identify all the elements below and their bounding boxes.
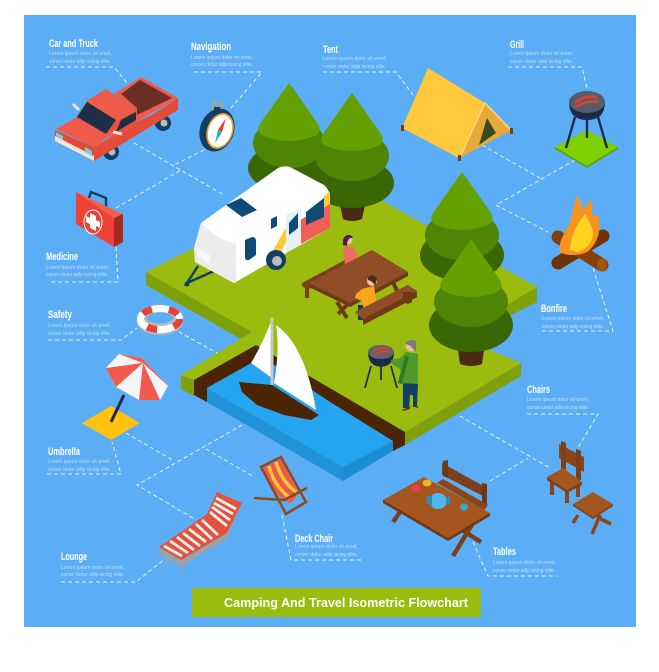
small window: [271, 216, 277, 229]
deck chair label: Deck Chair: [295, 533, 333, 545]
wheels: [103, 115, 171, 160]
tables label: [493, 546, 556, 574]
tent opening: [479, 118, 496, 145]
chairs label: conse ctetur adip iscing elite.: [527, 405, 589, 411]
wheel: [266, 250, 286, 270]
icon: small table: [573, 492, 613, 534]
icon: life ring: [137, 308, 183, 335]
far bench: [302, 260, 352, 298]
left sail: [251, 319, 272, 378]
mast: [270, 318, 274, 385]
teapot: [426, 493, 450, 509]
tree 1: [248, 83, 330, 192]
front: [55, 130, 94, 156]
icon: first aid kit: [76, 192, 123, 247]
legs: [393, 512, 481, 556]
grill label: Lorem ipsum dolor sit amet,: [510, 51, 573, 57]
tree 3: [420, 172, 504, 281]
safety label: [48, 309, 111, 337]
trailer body: [194, 166, 330, 283]
dashed connector lines: [46, 67, 613, 582]
navigation label: conse ctetur adip iscing elite.: [191, 62, 253, 68]
bonfire label: Bonfire: [541, 303, 567, 315]
table legs: [337, 280, 398, 318]
navigation label: [191, 41, 253, 68]
body side: [94, 98, 178, 161]
camper trailer: [184, 166, 330, 286]
log ends: [597, 258, 607, 272]
cups: [412, 480, 468, 510]
river water: [207, 357, 393, 481]
grill: [365, 345, 397, 388]
safety label: Safety: [48, 309, 73, 321]
roof window: [226, 198, 257, 217]
bowl: [569, 102, 605, 120]
tree 2: [310, 93, 394, 221]
grate: [569, 91, 605, 113]
navigation label: Navigation: [191, 41, 231, 53]
tables label: conse ctetur adip iscing elite.: [493, 568, 555, 574]
grass surface: [146, 176, 537, 432]
tables label: Tables: [493, 546, 516, 558]
lounge label: Lounge: [61, 551, 87, 563]
chairs label: [527, 384, 589, 411]
medicine label: [46, 251, 109, 278]
hull: [239, 382, 319, 420]
man at barbecue: [365, 340, 418, 411]
deck chair label: Lorem ipsum dolor sit amet,: [295, 544, 358, 550]
table top: [309, 272, 408, 307]
front bench: [355, 285, 417, 325]
tent label: conse ctetur adip iscing elite.: [323, 64, 386, 70]
flame: [560, 195, 600, 255]
icon: beach umbrella: [82, 354, 168, 440]
icon: grill: [555, 91, 618, 168]
legs: [566, 117, 607, 148]
man: [355, 275, 378, 320]
pole: [111, 395, 124, 422]
deck chair label: [295, 533, 358, 558]
medicine label: Medicine: [46, 251, 78, 263]
tables label: Lorem ipsum dolor sit amet,: [493, 560, 556, 566]
logs: [558, 236, 603, 265]
bonfire label: Lorem ipsum dolor sit amet,: [542, 316, 604, 322]
tent label: [323, 44, 387, 70]
sausages: [575, 97, 599, 107]
umbrella label: conse ctetur adip iscing elite.: [48, 467, 111, 473]
bench seat: [437, 479, 488, 510]
deck chair label: conse ctetur adip iscing elite.: [295, 552, 358, 558]
bumper: [55, 135, 94, 161]
bench back: [442, 463, 487, 498]
car and truck label: Car and Truck: [49, 38, 99, 50]
side stripe: [286, 203, 330, 252]
lounge label: conse ctetur adip iscing elite.: [61, 572, 124, 578]
lounge label: Lorem ipsum dolor sit amet,: [61, 565, 124, 571]
title banner: Camping And Travel Isometric Flowchart: [224, 595, 469, 610]
headlights: [56, 132, 92, 156]
brown river bank: [194, 345, 405, 451]
tent front: [459, 103, 512, 158]
umbrella label: Umbrella: [48, 446, 81, 458]
icon: picnic table: [383, 460, 490, 556]
icon: chair: [547, 441, 584, 503]
hood: [56, 116, 114, 147]
side window: [116, 112, 136, 132]
door: [286, 208, 301, 252]
back: [559, 444, 584, 472]
woman: [343, 235, 358, 266]
icon: tent: [401, 68, 513, 161]
front window: [245, 237, 256, 260]
tent label: Lorem ipsum dolor sit amet,: [323, 56, 387, 62]
chairs label: Lorem ipsum dolor sit amet,: [527, 397, 589, 403]
flap edges: [460, 103, 511, 157]
sailboat: [239, 318, 319, 420]
icon: bonfire: [558, 195, 607, 272]
icon: deck chair: [254, 457, 307, 514]
grass base: [555, 130, 618, 166]
seat: [547, 477, 582, 493]
man: [391, 340, 418, 411]
island side walls: [146, 272, 537, 445]
side window: [306, 198, 324, 225]
mirrors: [73, 104, 122, 134]
chairs label: Chairs: [527, 384, 550, 396]
lounge label: [61, 551, 124, 578]
table top: [383, 500, 490, 541]
icon: pickup truck: [55, 77, 178, 161]
car and truck label: Lorem ipsum dolor sit amet,: [49, 51, 112, 57]
tree 4: [429, 239, 513, 366]
bed: [114, 77, 178, 122]
hitch: [184, 266, 214, 286]
medicine label: conse ctetur adip iscing elite.: [46, 272, 108, 278]
grill label: conse ctetur adip iscing elite.: [510, 59, 573, 65]
cab: [77, 89, 136, 147]
medicine label: Lorem ipsum dolor sit amet,: [46, 265, 109, 271]
windshield: [77, 102, 116, 134]
navigation label: Lorem ipsum dolor sit amet,: [191, 55, 253, 61]
canopy: [106, 354, 168, 400]
picnic table with two people: [302, 235, 417, 325]
isometric island: [146, 176, 537, 481]
sand mat: [82, 406, 140, 440]
car and truck label: [49, 38, 112, 65]
car and truck label: conse ctetur adip iscing elite.: [49, 59, 111, 65]
umbrella label: Lorem ipsum dolor sit amet,: [48, 459, 111, 465]
title banner: [192, 588, 481, 617]
icon: sun lounger: [159, 492, 242, 572]
bonfire label: conse ctetur adip iscing elite.: [542, 324, 604, 330]
grill label: [510, 39, 573, 65]
umbrella label: [48, 446, 111, 473]
legs: [552, 480, 578, 503]
safety label: conse ctetur adip iscing elite.: [48, 331, 111, 337]
tent roof: [402, 68, 485, 158]
pegs: [401, 125, 513, 161]
icon: compass: [194, 102, 240, 156]
grill label: Grill: [510, 39, 524, 51]
bonfire label: [541, 303, 604, 330]
right sail: [274, 325, 316, 410]
tent label: Tent: [323, 44, 338, 56]
safety label: Lorem ipsum dolor sit amet,: [48, 323, 111, 329]
